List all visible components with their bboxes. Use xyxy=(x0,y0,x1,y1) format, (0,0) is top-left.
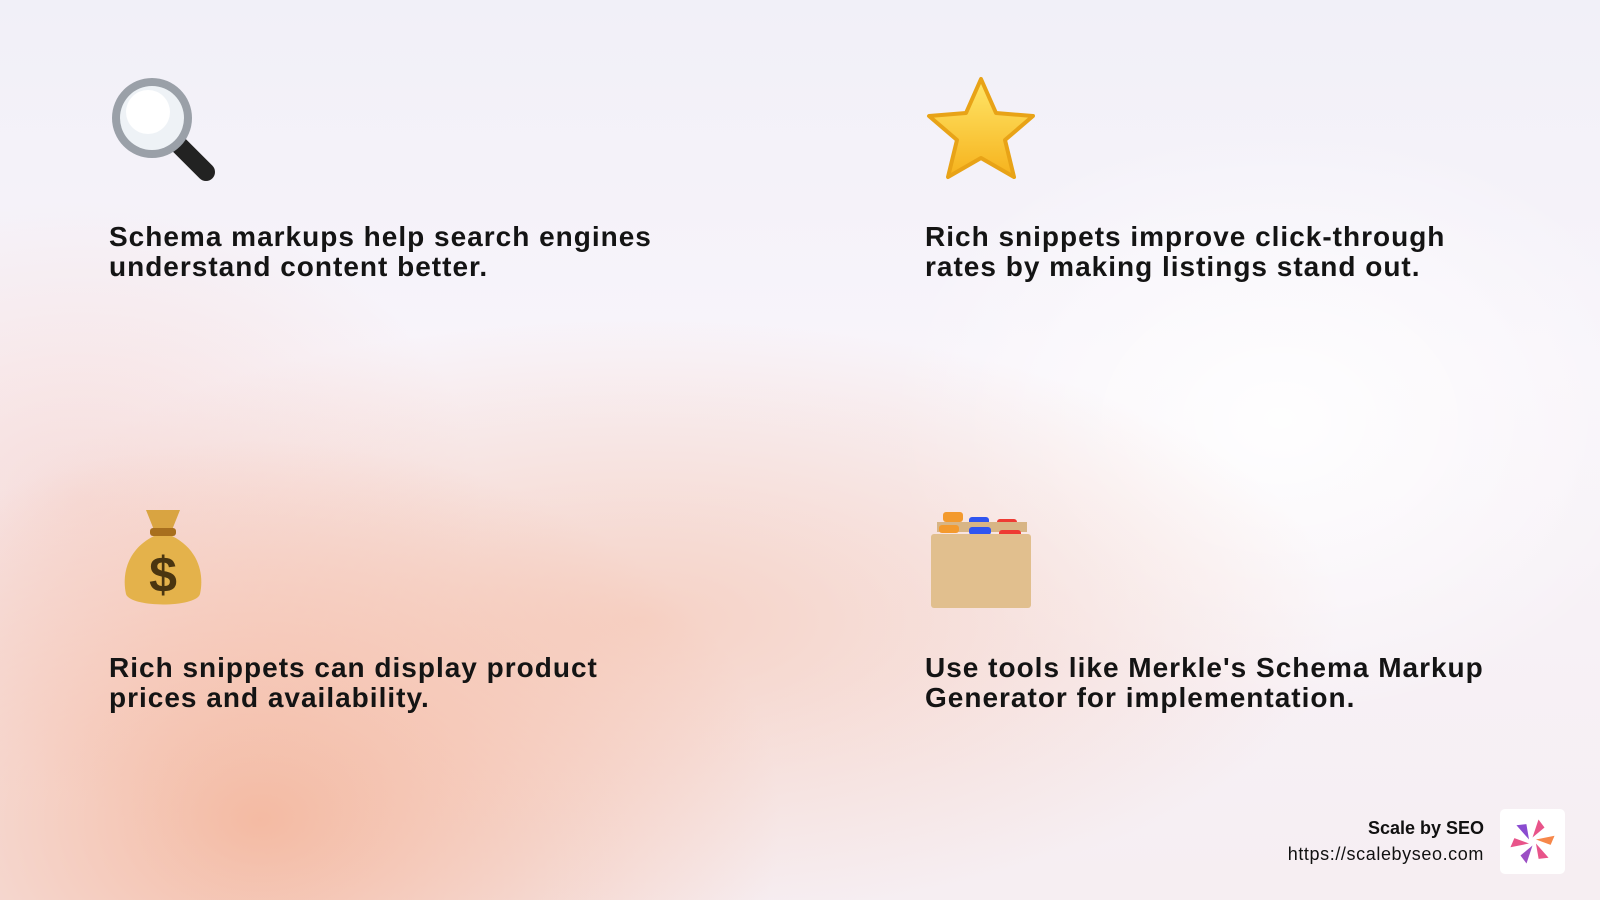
footer: brand xyxy=(1288,818,1484,864)
text: schema markups: understand content better. xyxy=(109,251,488,282)
text: rich snippets CTR: Rich snippets improve click-through xyxy=(925,221,1445,252)
icon: magnifying glass xyxy=(112,78,215,181)
footer: brand: Scale by SEO xyxy=(1368,818,1484,838)
icon: logo xyxy=(1500,809,1565,874)
text: rich snippets CTR: rates by making listings stand out. xyxy=(925,251,1421,282)
text: tools: Use tools like Merkle's Schema Markup xyxy=(925,652,1484,683)
text: product prices: Rich snippets can display product xyxy=(109,652,598,683)
icon: money bag: $ xyxy=(149,547,177,603)
text: product prices xyxy=(109,652,598,713)
text: schema markups xyxy=(109,221,652,282)
text: rich snippets CTR xyxy=(925,221,1445,282)
text: product prices: prices and availability. xyxy=(109,682,430,713)
icon: card index box xyxy=(931,512,1031,608)
text: tools: Generator for implementation. xyxy=(925,682,1355,713)
text: tools xyxy=(925,652,1484,713)
icon: star xyxy=(926,76,1035,180)
footer: brand: https://scalebyseo.com xyxy=(1288,844,1484,864)
icon: money bag xyxy=(124,510,202,604)
text: schema markups: Schema markups help search engines xyxy=(109,221,652,252)
